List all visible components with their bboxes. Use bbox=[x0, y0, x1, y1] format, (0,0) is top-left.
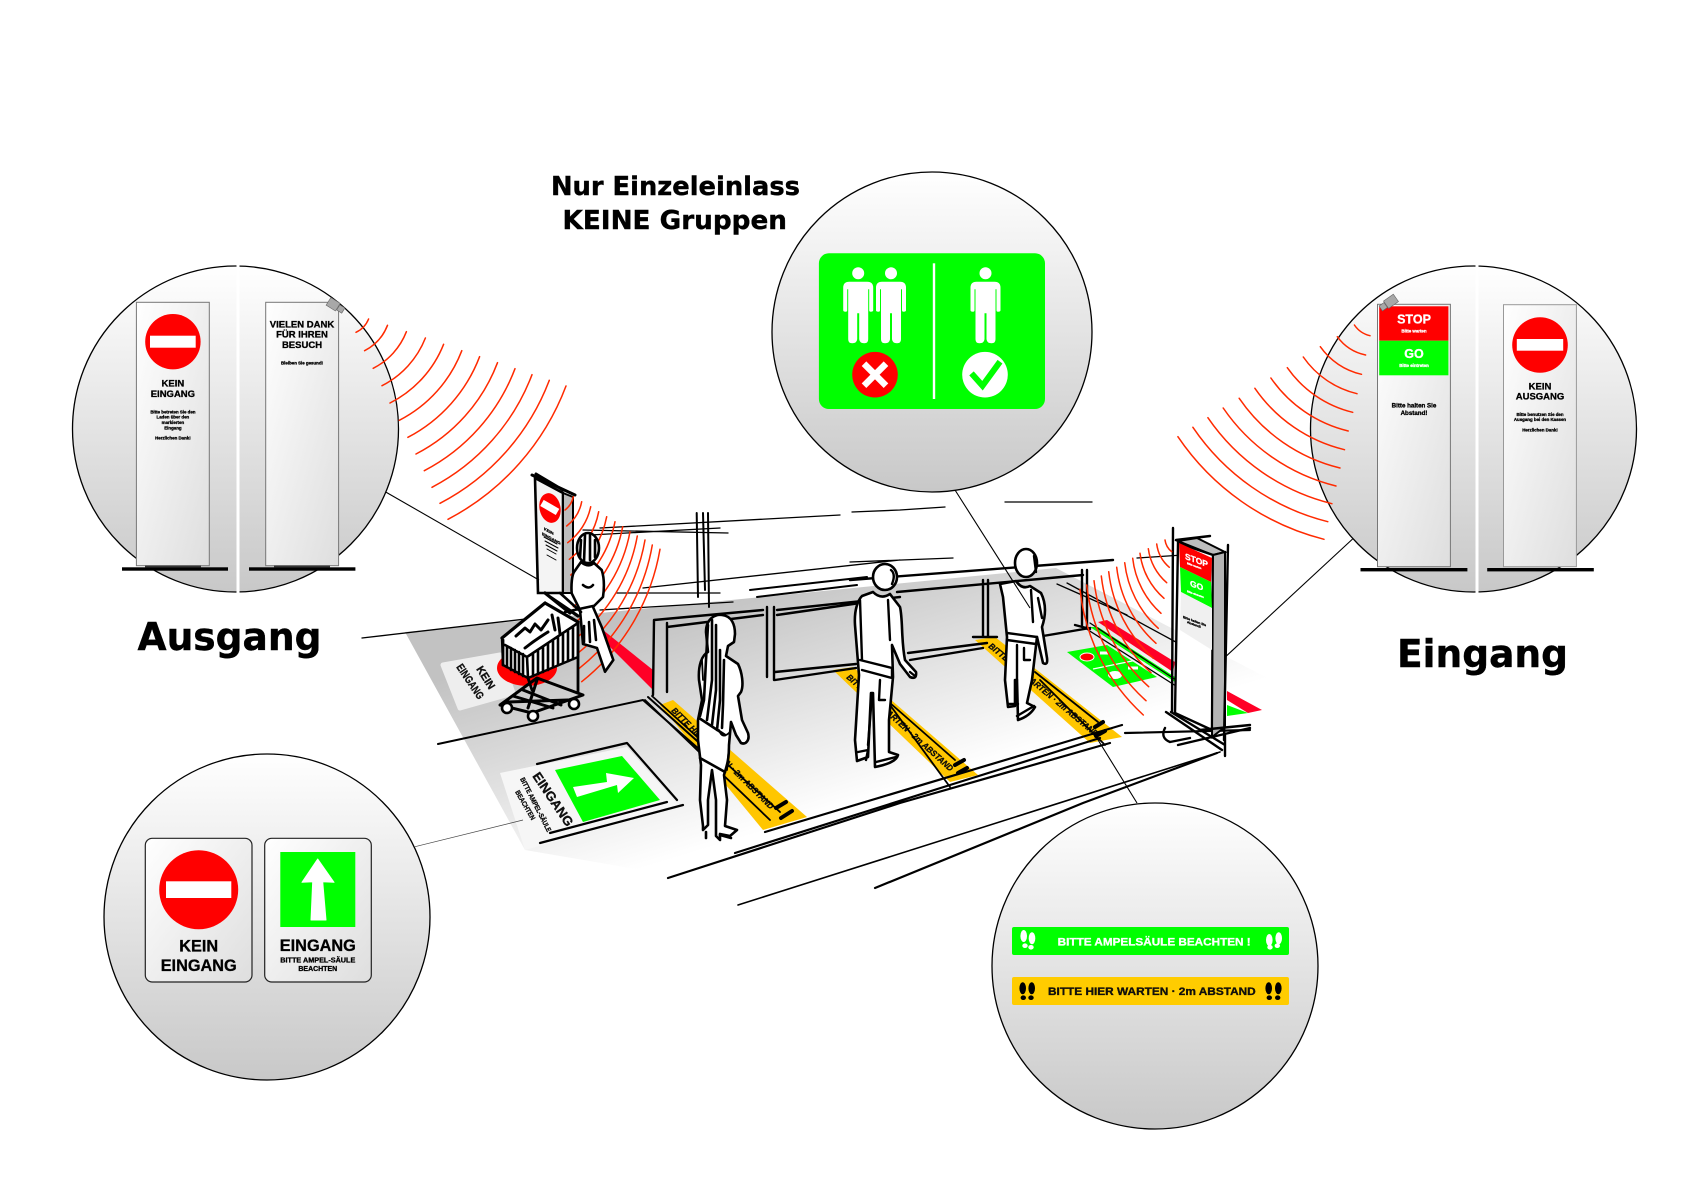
exit red floor strip bbox=[600, 630, 653, 690]
floor sticker: kein Eingang: KEIN bbox=[473, 664, 497, 692]
stele: kein Eingang: Laden über den bbox=[157, 415, 190, 420]
green strip: BITTE AMPELSÄULE BEACHTEN ! bbox=[1058, 936, 1251, 949]
sensor waves: Eingang circle bbox=[1178, 325, 1370, 539]
circle panel: Ausgang bbox=[72, 262, 398, 596]
icon: one person bbox=[970, 267, 1000, 343]
exit stele bbox=[532, 474, 575, 593]
heading: Nur Einzeleinlass bbox=[551, 172, 800, 236]
shopping cart bbox=[500, 593, 583, 721]
entrance traffic-light stele: Abstand! bbox=[1187, 620, 1201, 629]
sticker: Eingang bbox=[265, 838, 371, 982]
person: woman in queue bbox=[698, 615, 749, 840]
stele: Stop and Go bbox=[1360, 304, 1467, 571]
stele: kein Eingang: Eingang bbox=[164, 425, 182, 430]
sensor waves: exit stele bbox=[565, 497, 660, 682]
stele: kein Eingang: KEIN bbox=[162, 379, 184, 390]
icon: sensor camera bbox=[1378, 294, 1398, 312]
sticker: kein Eingang: EINGANG bbox=[161, 957, 237, 975]
sketched walls and floor lines bbox=[362, 502, 1250, 905]
entrance traffic-light stele bbox=[1163, 528, 1250, 756]
stele: vielen Dank: VIELEN DANK bbox=[270, 319, 334, 330]
floor sticker: kein Eingang bbox=[443, 650, 557, 708]
sticker: Eingang: BITTE AMPEL-SÄULE bbox=[280, 957, 356, 965]
floor sticker: Eingang arrow bbox=[500, 743, 683, 850]
yellow strip bbox=[1012, 977, 1289, 1005]
stele: kein Eingang: Herzlichen Dank! bbox=[155, 435, 191, 440]
sticker: kein Eingang bbox=[145, 838, 252, 982]
stele: kein Eingang: Bitte betreten Sie den bbox=[150, 409, 196, 414]
icon: white footprints bbox=[1020, 930, 1282, 950]
green floor sticker: einzeln bbox=[1067, 645, 1157, 687]
stele: kein Ausgang: Ausgang bei den Kassen bbox=[1514, 417, 1566, 422]
stele: kein Eingang bbox=[122, 302, 228, 571]
floor area bbox=[405, 568, 1300, 880]
circle panel: floor strips bbox=[992, 803, 1318, 1129]
stele: kein Ausgang: KEIN bbox=[1529, 382, 1551, 393]
person: woman with cart bbox=[560, 533, 613, 672]
circle panel: floor stickers bbox=[104, 754, 430, 1080]
yellow strip: BITTE HIER WARTEN · 2m ABSTAND bbox=[1048, 986, 1256, 998]
stele: kein Ausgang: Bitte benutzen Sie den bbox=[1516, 412, 1564, 417]
exit stele: EINGANG bbox=[542, 531, 561, 546]
entrance traffic-light stele: Bitte eintreten bbox=[1187, 589, 1204, 599]
sticker: kein Eingang: KEIN bbox=[179, 938, 218, 956]
heading: Eingang: Eingang bbox=[1397, 632, 1568, 676]
entrance traffic-light stele: Bitte warten bbox=[1187, 561, 1202, 570]
yellow waiting strip 1: BITTE HIER WARTEN · 2m ABSTAND bbox=[670, 705, 776, 811]
stele: kein Ausgang: AUSGANG bbox=[1516, 392, 1564, 403]
stele: Stop and Go: GO bbox=[1404, 347, 1424, 361]
icon: green check bbox=[962, 352, 1008, 398]
circle panel: Eingang bbox=[1310, 262, 1636, 596]
icon: black footprints bbox=[1019, 982, 1282, 1000]
icon: two persons bbox=[843, 267, 906, 343]
floor sticker: kein Eingang: EINGANG bbox=[454, 662, 486, 702]
sensor waves: entrance stele bbox=[1080, 540, 1172, 715]
floor sticker: Eingang arrow: EINGANG bbox=[530, 769, 577, 829]
barrier railings bbox=[653, 560, 1113, 695]
leader lines bbox=[386, 490, 1353, 847]
heading: Nur Einzeleinlass: KEINE Gruppen bbox=[562, 206, 787, 236]
person: man near entrance bbox=[1000, 549, 1047, 720]
circle panel: single entry bbox=[772, 172, 1092, 492]
yellow waiting strip 3: BITTE HIER WARTEN · 2m ABSTAND bbox=[987, 641, 1100, 739]
sensor waves: Ausgang circle bbox=[356, 319, 566, 519]
stele: kein Eingang: EINGANG bbox=[151, 389, 195, 400]
icon: red cross bbox=[852, 352, 898, 398]
entrance traffic-light stele: GO bbox=[1190, 578, 1203, 593]
stele: vielen Dank: Bleiben Sie gesund! bbox=[281, 360, 324, 365]
entrance traffic-light stele: STOP bbox=[1185, 551, 1208, 569]
stele: vielen Dank: FÜR IHREN bbox=[276, 330, 328, 341]
stele: Stop and Go: STOP bbox=[1397, 312, 1431, 326]
heading: Ausgang: Ausgang bbox=[138, 615, 322, 659]
stele: Stop and Go: Abstand! bbox=[1401, 410, 1427, 417]
stele: Stop and Go: Bitte eintreten bbox=[1399, 363, 1429, 368]
sticker: Eingang: EINGANG bbox=[280, 937, 356, 955]
heading: Nur Einzeleinlass: Nur Einzeleinlass bbox=[551, 172, 800, 202]
yellow waiting strip 1 bbox=[645, 696, 807, 830]
stele: kein Eingang: markierten bbox=[162, 420, 184, 425]
floor sticker: Eingang arrow: BEACHTEN bbox=[513, 790, 536, 822]
stele: kein Ausgang: Herzlichen Dank! bbox=[1522, 428, 1558, 433]
divider bbox=[933, 263, 935, 399]
stele: kein Ausgang bbox=[1487, 305, 1594, 571]
exit stele: KEIN bbox=[544, 526, 554, 536]
green sign bbox=[819, 253, 1045, 409]
entrance traffic-light stele: Bitte halten Sie bbox=[1183, 615, 1206, 627]
floor sticker: Eingang arrow: BITTE AMPEL-SÄULE bbox=[518, 776, 553, 834]
stele: vielen Dank: BESUCH bbox=[282, 340, 322, 351]
stele: Stop and Go: Bitte warten bbox=[1401, 328, 1427, 333]
person: man in queue bbox=[855, 564, 916, 767]
yellow waiting strip 2: BITTE HIER WARTEN · 2m ABSTAND bbox=[845, 672, 955, 773]
green strip bbox=[1012, 927, 1289, 955]
entrance red and green floor strips bbox=[1090, 620, 1262, 716]
stele: vielen Dank bbox=[249, 302, 355, 571]
icon: sensor camera bbox=[326, 298, 346, 314]
sticker: Eingang: BEACHTEN bbox=[298, 966, 337, 973]
stele: Stop and Go: Bitte halten Sie bbox=[1392, 403, 1437, 410]
shop floor scene bbox=[362, 474, 1300, 905]
